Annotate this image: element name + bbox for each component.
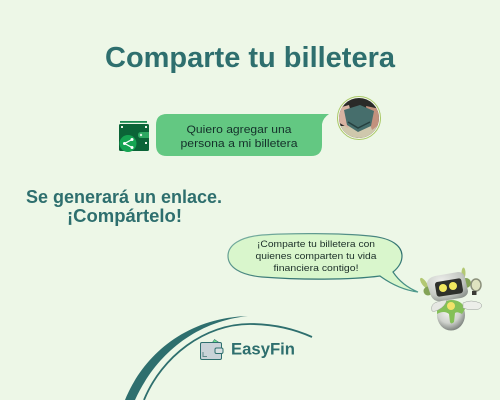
bubble text: Quiero agregar una bbox=[186, 124, 292, 136]
decorative arc: thin bbox=[144, 324, 312, 400]
logo wordmark: EasyFin bbox=[231, 340, 295, 358]
speech bubble: user request bbox=[156, 114, 329, 156]
robot message text: quienes comparten tu vida bbox=[256, 251, 377, 262]
bubble text: persona a mi billetera bbox=[180, 138, 298, 150]
icon: logo wallet bbox=[200, 340, 223, 360]
instruction text: Se generará un enlace. bbox=[26, 187, 222, 207]
speech bubble: robot message bbox=[228, 234, 418, 292]
title: Comparte tu billetera bbox=[105, 42, 396, 74]
decorative arc: thick bbox=[125, 316, 248, 400]
icon: robot mascot with light bulb bbox=[419, 268, 482, 330]
robot message text: financiera contigo! bbox=[274, 263, 358, 274]
instruction text: ¡Compártelo! bbox=[67, 206, 182, 226]
robot message text: ¡Comparte tu billetera con bbox=[257, 239, 375, 250]
avatar: hands holding wallet photo bbox=[338, 96, 380, 140]
icon: wallet with share symbol bbox=[119, 121, 149, 152]
logo: EasyFin bbox=[200, 340, 295, 360]
